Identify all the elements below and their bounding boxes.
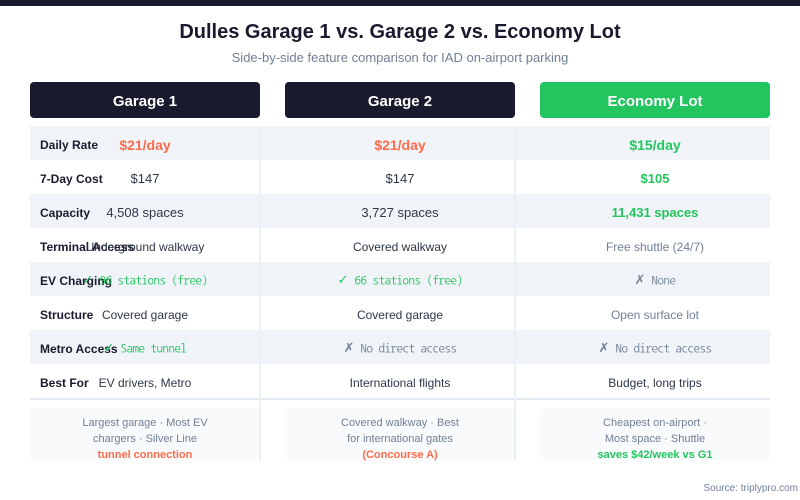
row: EV Charging: ✗ None bbox=[635, 273, 675, 288]
column header: Garage 2 bbox=[285, 82, 515, 118]
row: Metro Access: ✓ Same tunnel bbox=[104, 341, 186, 356]
row: Daily Rate: $21/day bbox=[119, 137, 171, 153]
source note: Source: triplypro.com bbox=[704, 483, 798, 494]
row: 7-Day Cost: $105 bbox=[641, 171, 669, 186]
column header: Economy Lot: Economy Lot bbox=[607, 93, 702, 110]
column header: Garage 2: Garage 2 bbox=[368, 93, 432, 110]
row: Structure: Covered garage bbox=[102, 308, 188, 322]
row: Structure: Structure bbox=[40, 308, 93, 322]
row: Daily Rate: $15/day bbox=[629, 137, 681, 153]
row: Metro Access: ✗ No direct access bbox=[344, 341, 456, 356]
row: Capacity: Capacity bbox=[40, 206, 90, 220]
row: Capacity: 3,727 spaces bbox=[361, 205, 439, 220]
column header: Garage 1 bbox=[30, 82, 260, 118]
row: Metro Access bbox=[30, 330, 770, 364]
row: Best For: Best For bbox=[40, 376, 89, 390]
subtitle: Side-by-side feature comparison for IAD on-airport parking bbox=[232, 50, 568, 65]
summary card: Garage 2: for international gates bbox=[347, 433, 453, 445]
summary card: Garage 2: Covered walkway · Best bbox=[341, 417, 459, 429]
title: Dulles Garage 1 vs. Garage 2 vs. Economy Lot bbox=[179, 21, 621, 43]
row: Terminal Access: Underground walkway bbox=[86, 240, 204, 254]
row: 7-Day Cost: $147 bbox=[386, 171, 414, 186]
summary card: Garage 2 bbox=[285, 408, 515, 460]
row: EV Charging bbox=[30, 262, 770, 296]
row: Best For: Budget, long trips bbox=[608, 376, 702, 390]
row: Daily Rate: $21/day bbox=[374, 137, 426, 153]
summary card: Garage 1: Largest garage · Most EV bbox=[82, 417, 208, 429]
row: 7-Day Cost: $147 bbox=[131, 171, 159, 186]
summary card: Garage 1: chargers · Silver Line bbox=[93, 433, 197, 445]
row: 7-Day Cost bbox=[40, 171, 670, 186]
summary card: Garage 2: (Concourse A) bbox=[362, 449, 438, 461]
row: Terminal Access: Terminal Access bbox=[40, 240, 134, 254]
row: EV Charging: ✓ 96 stations (free) bbox=[83, 273, 207, 288]
row: Terminal Access: Covered walkway bbox=[353, 240, 447, 254]
row: Daily Rate bbox=[30, 126, 770, 160]
row: Best For bbox=[40, 376, 702, 390]
summary card: Economy Lot bbox=[540, 408, 770, 460]
summary card: Economy Lot: saves $42/week vs G1 bbox=[598, 449, 712, 461]
column header: Garage 1: Garage 1 bbox=[113, 93, 177, 110]
row: Capacity: 11,431 spaces bbox=[612, 205, 698, 220]
row: EV Charging: EV Charging bbox=[40, 274, 112, 288]
row: Structure: Covered garage bbox=[357, 308, 443, 322]
row: Metro Access: Metro Access bbox=[40, 342, 118, 356]
row: EV Charging: ✓ 66 stations (free) bbox=[338, 273, 462, 288]
row: Structure: Open surface lot bbox=[611, 308, 699, 322]
row: Structure bbox=[40, 308, 699, 322]
row: Capacity: 4,508 spaces bbox=[106, 205, 184, 220]
row: Best For: EV drivers, Metro bbox=[99, 376, 191, 390]
summary card: Economy Lot: Cheapest on-airport · bbox=[603, 417, 707, 429]
row: Daily Rate: Daily Rate bbox=[40, 138, 98, 152]
row: Metro Access: ✗ No direct access bbox=[599, 341, 711, 356]
summary card: Garage 1 bbox=[30, 408, 260, 460]
row: Terminal Access: Free shuttle (24/7) bbox=[606, 240, 704, 254]
row: Terminal Access bbox=[40, 240, 704, 254]
column header: Economy Lot bbox=[540, 82, 770, 118]
summary card: Garage 1: tunnel connection bbox=[98, 449, 192, 461]
summary card: Economy Lot: Most space · Shuttle bbox=[605, 433, 705, 445]
row: Best For: International flights bbox=[350, 376, 450, 390]
top bar bbox=[0, 0, 800, 6]
row: 7-Day Cost: 7-Day Cost bbox=[40, 172, 103, 186]
row: Capacity bbox=[30, 194, 770, 228]
